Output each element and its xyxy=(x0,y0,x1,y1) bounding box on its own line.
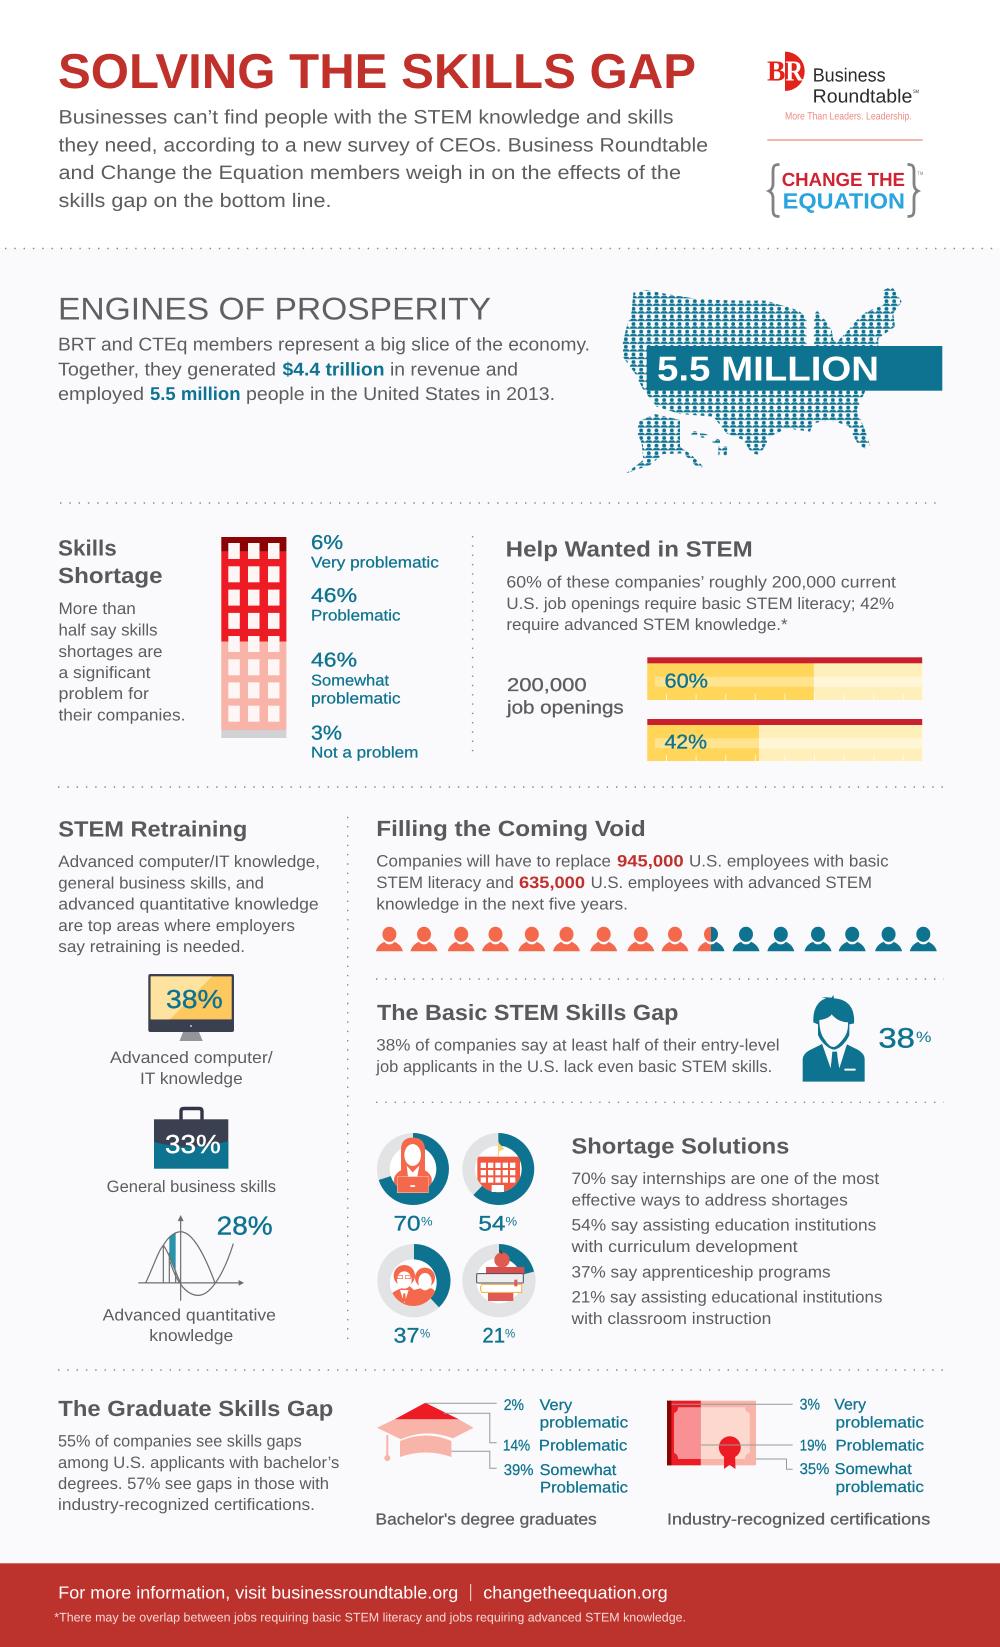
description xyxy=(58,600,186,724)
building chart labels: 46% xyxy=(311,650,357,672)
bar: 42 percent xyxy=(647,719,922,761)
heading: Filling the Coming Void xyxy=(376,816,646,841)
donut: 70 percent internships: 70 xyxy=(394,1213,420,1236)
building chart labels: Very problematic xyxy=(311,554,439,571)
building chart labels: Not a problem xyxy=(311,745,418,762)
body text: with curriculum development xyxy=(570,1238,798,1256)
icon: quantitative graph xyxy=(138,1211,273,1301)
certification labels: Problematic xyxy=(836,1438,924,1455)
icon: businessman xyxy=(803,995,865,1082)
body text: 70% say internships are one of the most xyxy=(572,1170,880,1188)
description: shortages are xyxy=(58,643,162,661)
body text: knowledge in the next five years. xyxy=(376,895,628,913)
map of people with 5.5 million banner: 5.5 MILLION xyxy=(657,351,879,389)
heading: STEM Retraining xyxy=(58,816,247,841)
donut: 37 percent apprenticeship: % xyxy=(420,1326,430,1340)
graduate labels: 2% xyxy=(504,1397,524,1414)
body text: general business skills, and xyxy=(58,875,264,893)
graduate labels: Somewhat xyxy=(540,1462,617,1479)
body text: 54% say assisting education institutions xyxy=(572,1217,876,1235)
body text: Advanced computer/IT knowledge, xyxy=(58,853,320,871)
description: their companies. xyxy=(58,706,186,724)
body text xyxy=(506,574,896,634)
body text: STEM literacy and xyxy=(376,874,514,892)
body text xyxy=(58,334,590,404)
body text: Companies will have to replace xyxy=(376,853,611,871)
header panel xyxy=(0,0,1000,248)
heading: Shortage Solutions xyxy=(571,1133,789,1158)
map of people with 5.5 million banner xyxy=(622,286,942,474)
logo: Business Roundtable: More Than Leaders. Leadership. xyxy=(785,110,912,122)
intro text: and Change the Equation members weigh in on the effects of the xyxy=(58,162,681,184)
icon: graduation cap xyxy=(377,1403,474,1461)
body text xyxy=(375,1037,780,1076)
body text: 55% of companies see skills gaps xyxy=(58,1433,302,1451)
caption: bachelor's degree graduates: Bachelor's degree graduates xyxy=(376,1511,597,1528)
footnote: *There may be overlap between jobs requiring basic STEM literacy and jobs requiring advanced STEM knowledge. xyxy=(54,1611,686,1625)
icon: certificate xyxy=(667,1401,756,1469)
donut: 70 percent internships xyxy=(377,1133,449,1236)
description: More than xyxy=(58,600,136,618)
donut: 21 percent classroom: 21 xyxy=(482,1324,505,1347)
caption: advanced computer: Advanced computer/ xyxy=(110,1049,273,1067)
building chart labels xyxy=(311,532,439,762)
stat: 38 percent: 38 xyxy=(878,1022,915,1053)
body text: say retraining is needed. xyxy=(58,938,245,956)
logo: Business Roundtable: Roundtable xyxy=(813,86,912,107)
icon: briefcase 33 percent xyxy=(154,1108,228,1169)
body text: U.S. employees with advanced STEM xyxy=(591,874,872,892)
heading: Help Wanted in STEM xyxy=(506,537,753,562)
donut: 70 percent internships: % xyxy=(421,1215,433,1229)
logo: Change the Equation: CHANGE THE xyxy=(782,170,905,191)
body text: BRT and CTEq members represent a big slice of the economy. xyxy=(58,334,590,355)
icon: quantitative graph: 28% xyxy=(217,1211,273,1241)
panel: the graduate skills gap xyxy=(58,1396,930,1528)
icon: monitor 38 percent: 38% xyxy=(166,984,223,1014)
body text: $4.4 trillion xyxy=(282,359,384,380)
building chart xyxy=(221,537,286,738)
leader lines: graduation cap xyxy=(425,1403,497,1468)
graduate labels xyxy=(503,1397,628,1497)
panel: the basic STEM skills gap xyxy=(375,995,931,1082)
donut: 54 percent curriculum: 54 xyxy=(478,1213,506,1236)
stat: 38 percent: % xyxy=(916,1029,931,1046)
caption: advanced quantitative knowledge: knowledge xyxy=(149,1327,233,1345)
logo: Business Roundtable: SM xyxy=(913,89,919,95)
description: a significant xyxy=(58,664,151,682)
logo: Change the Equation: TM xyxy=(917,171,923,177)
bar: 60 percent: 60% xyxy=(664,671,708,693)
body text: U.S. employees with basic xyxy=(689,853,889,871)
building chart labels: 46% xyxy=(311,585,357,607)
certification labels: 19% xyxy=(800,1438,827,1455)
panel: help wanted in STEM xyxy=(506,537,922,761)
caption: advanced computer xyxy=(110,1049,273,1088)
intro text: Businesses can’t find people with the STEM knowledge and skills xyxy=(58,106,674,128)
intro text: skills gap on the bottom line. xyxy=(58,190,332,212)
body text: Together, they generated xyxy=(58,359,276,380)
label: job openings xyxy=(506,674,624,717)
body text: U.S. job openings require basic STEM literacy; 42% xyxy=(506,595,894,613)
description: problem for xyxy=(58,685,150,703)
certification labels: problematic xyxy=(836,1415,924,1432)
caption: industry-recognized certifications: Industry-recognized certifications xyxy=(667,1511,930,1528)
graduate labels: Problematic xyxy=(539,1438,628,1455)
footer xyxy=(0,1563,1000,1647)
caption: advanced quantitative knowledge: Advanced quantitative xyxy=(103,1307,276,1325)
caption: advanced quantitative knowledge xyxy=(103,1307,276,1345)
title: SOLVING THE SKILLS GAP xyxy=(58,45,696,99)
body text: are top areas where employers xyxy=(58,917,295,935)
intro text xyxy=(58,106,708,212)
donut: 37 percent apprenticeship xyxy=(377,1244,451,1347)
donut: 54 percent curriculum xyxy=(462,1133,534,1236)
caption: general business skills: General business skills xyxy=(107,1178,276,1196)
body text: degrees. 57% see gaps in those with xyxy=(58,1475,329,1493)
logo: Business Roundtable: B xyxy=(767,56,786,88)
logo: Change the Equation: EQUATION xyxy=(783,188,905,213)
panel: filling the coming void xyxy=(376,816,937,951)
donut: 21 percent classroom: % xyxy=(505,1326,515,1340)
certification labels: problematic xyxy=(836,1479,924,1496)
stat: 38 percent xyxy=(878,1022,931,1053)
body text: people in the United States in 2013. xyxy=(246,383,555,404)
heading: Skills xyxy=(58,536,117,561)
certification labels: 35% xyxy=(800,1461,830,1478)
heading: The Basic STEM Skills Gap xyxy=(377,1000,678,1025)
certification labels: Very xyxy=(834,1396,866,1413)
description: half say skills xyxy=(58,622,158,640)
body text: 38% of companies say at least half of their entry-level xyxy=(376,1037,780,1055)
icon: briefcase 33 percent: 33% xyxy=(165,1129,221,1159)
body text xyxy=(58,853,320,956)
certification labels xyxy=(800,1396,924,1496)
donut: 54 percent curriculum: % xyxy=(506,1215,517,1229)
heading: The Graduate Skills Gap xyxy=(58,1396,333,1421)
certification labels: Somewhat xyxy=(835,1461,913,1478)
panel: skills shortage xyxy=(58,532,439,762)
people row: basic versus advanced xyxy=(376,927,937,951)
building chart labels: Somewhat xyxy=(311,672,390,689)
body text: require advanced STEM knowledge.* xyxy=(506,616,788,634)
footer links: For more information, visit businessroundtable.org xyxy=(58,1582,458,1602)
body text xyxy=(570,1170,882,1328)
body text: effective ways to address shortages xyxy=(572,1191,848,1209)
body text xyxy=(58,1433,339,1514)
body text: 60% of these companies’ roughly 200,000 current xyxy=(506,574,896,592)
body text: employed xyxy=(58,383,144,404)
panel: shortage solutions xyxy=(377,1133,882,1347)
icon: monitor 38 percent xyxy=(148,974,234,1041)
logo: Change the Equation xyxy=(769,164,923,216)
body text: job applicants in the U.S. lack even basic STEM skills. xyxy=(375,1058,772,1076)
building chart labels: 6% xyxy=(311,532,343,554)
logo: Business Roundtable: Business xyxy=(813,66,886,87)
intro text: they need, according to a new survey of CEOs. Business Roundtable xyxy=(58,134,708,156)
body text: 945,000 xyxy=(617,853,684,871)
certification labels: 3% xyxy=(800,1396,820,1413)
body text: with classroom instruction xyxy=(570,1310,771,1328)
body text xyxy=(376,853,889,913)
graduate labels: 39% xyxy=(504,1462,534,1479)
bar: 42 percent: 42% xyxy=(664,731,707,753)
donut: 37 percent apprenticeship: 37 xyxy=(394,1324,420,1347)
graduate labels: Very xyxy=(540,1397,572,1414)
building chart labels: Problematic xyxy=(311,608,401,625)
heading: ENGINES OF PROSPERITY xyxy=(58,290,491,326)
label: job openings: job openings xyxy=(506,696,624,717)
body text: advanced quantitative knowledge xyxy=(58,896,319,914)
body text: 37% say apprenticeship programs xyxy=(572,1263,831,1281)
donut charts with icons xyxy=(377,1133,536,1347)
caption: advanced computer: IT knowledge xyxy=(140,1070,243,1088)
heading: Shortage xyxy=(58,563,163,588)
panel: engines of prosperity xyxy=(58,286,942,474)
logo: Business Roundtable: R xyxy=(786,56,804,88)
body text: 635,000 xyxy=(519,874,585,892)
body text: industry-recognized certifications. xyxy=(58,1496,315,1514)
body text: among U.S. applicants with bachelor’s xyxy=(58,1454,339,1472)
panel: STEM retraining xyxy=(58,816,320,1345)
building chart labels: 3% xyxy=(311,722,342,744)
building chart labels: problematic xyxy=(311,690,401,707)
divider line xyxy=(5,248,1000,250)
graduate labels: Problematic xyxy=(540,1480,628,1497)
footer links: changetheequation.org xyxy=(483,1582,668,1602)
leader lines: certificate xyxy=(671,1404,793,1469)
logo: Business Roundtable xyxy=(767,52,923,140)
body text: 5.5 million xyxy=(150,383,240,404)
footer links xyxy=(58,1582,668,1602)
body text: in revenue and xyxy=(390,359,518,380)
donut: 21 percent classroom xyxy=(462,1244,536,1347)
graduate labels: problematic xyxy=(540,1415,628,1432)
label: job openings: 200,000 xyxy=(507,674,587,695)
body text: 21% say assisting educational institutions xyxy=(572,1289,882,1307)
heading xyxy=(58,536,163,588)
graduate labels: 14% xyxy=(503,1438,530,1455)
bar: 60 percent xyxy=(647,657,922,700)
